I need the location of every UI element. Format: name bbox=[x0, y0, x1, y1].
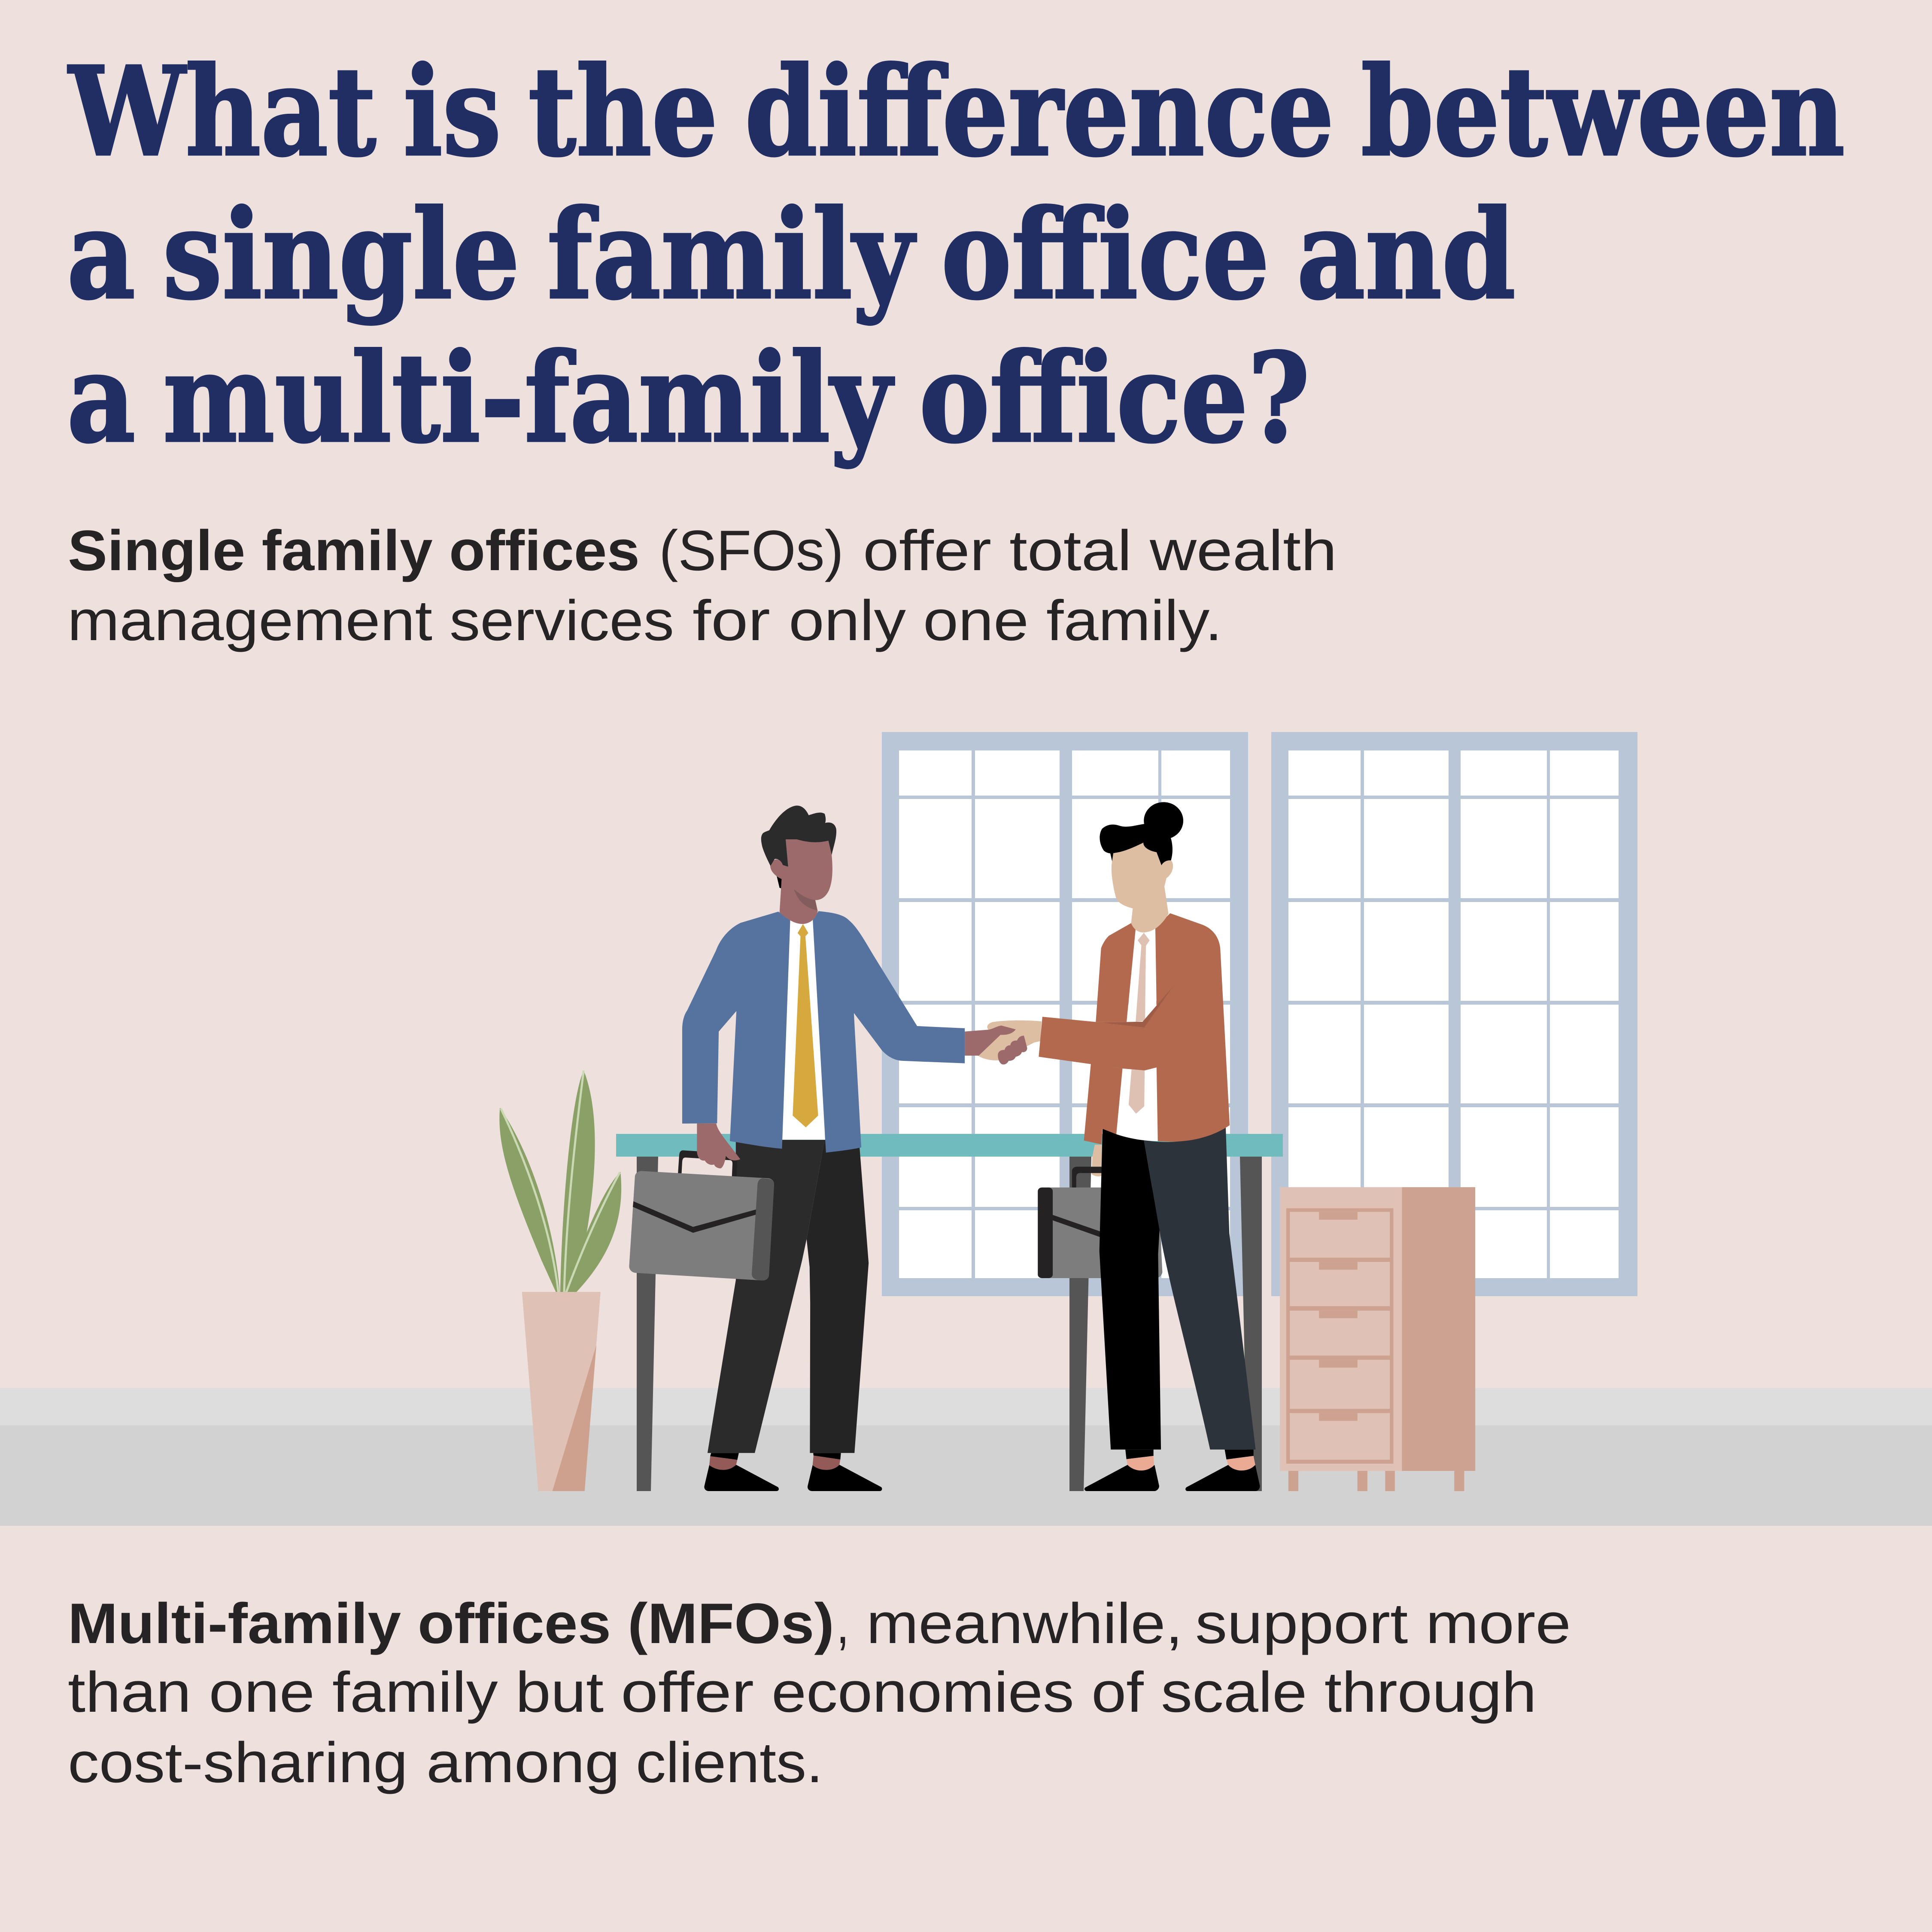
text block: multi-family offices: offer bbox=[621, 1661, 754, 1724]
person: man bbox=[629, 805, 1027, 1491]
desk bbox=[616, 1134, 1283, 1491]
man torso and head bbox=[682, 805, 1027, 1153]
text block: multi-family offices: clients. bbox=[636, 1731, 823, 1795]
text block: single family offices: services bbox=[450, 589, 674, 653]
text block: multi-family offices: among bbox=[426, 1731, 620, 1795]
floor bbox=[0, 1388, 1932, 1526]
text block: single family offices bbox=[67, 519, 1337, 653]
title: a single family office and bbox=[67, 183, 1516, 327]
text block: multi-family offices bbox=[68, 1592, 1571, 1795]
window: right bbox=[1271, 732, 1637, 1296]
woman briefcase bbox=[1038, 1145, 1162, 1278]
text block: single family offices: only bbox=[789, 589, 906, 653]
person: woman bbox=[978, 802, 1260, 1491]
text block: single family offices: management bbox=[67, 589, 432, 653]
filing cabinet bbox=[1280, 1187, 1475, 1491]
text block: single family offices: one bbox=[923, 589, 1029, 653]
text block: single family offices: (SFOs) bbox=[659, 519, 844, 583]
text block: multi-family offices: meanwhile, bbox=[866, 1592, 1183, 1656]
text block: multi-family offices: cost-sharing bbox=[68, 1731, 408, 1795]
text block: multi-family offices: economies of scale through bbox=[772, 1661, 1537, 1724]
man briefcase bbox=[629, 1124, 774, 1280]
text block: multi-family offices: , bbox=[836, 1592, 849, 1656]
text block: multi-family offices: than one family but bbox=[68, 1661, 604, 1724]
text block: multi-family offices: Multi-family offices (MFOs) bbox=[68, 1592, 834, 1656]
text block: single family offices: for bbox=[693, 589, 770, 653]
potted plant bbox=[499, 1070, 621, 1491]
title: a multi-family office? bbox=[67, 326, 1310, 470]
man legs and shoes bbox=[704, 1140, 882, 1491]
text block: single family offices: Single family offices bbox=[68, 519, 640, 583]
woman torso and head bbox=[978, 802, 1230, 1144]
text block: single family offices: family. bbox=[1046, 589, 1222, 653]
text block: multi-family offices: support more bbox=[1195, 1592, 1571, 1656]
woman legs and shoes bbox=[1084, 1127, 1260, 1491]
window: left bbox=[882, 732, 1248, 1296]
text block: single family offices: offer total wealth bbox=[863, 519, 1337, 583]
title bbox=[67, 40, 1845, 470]
